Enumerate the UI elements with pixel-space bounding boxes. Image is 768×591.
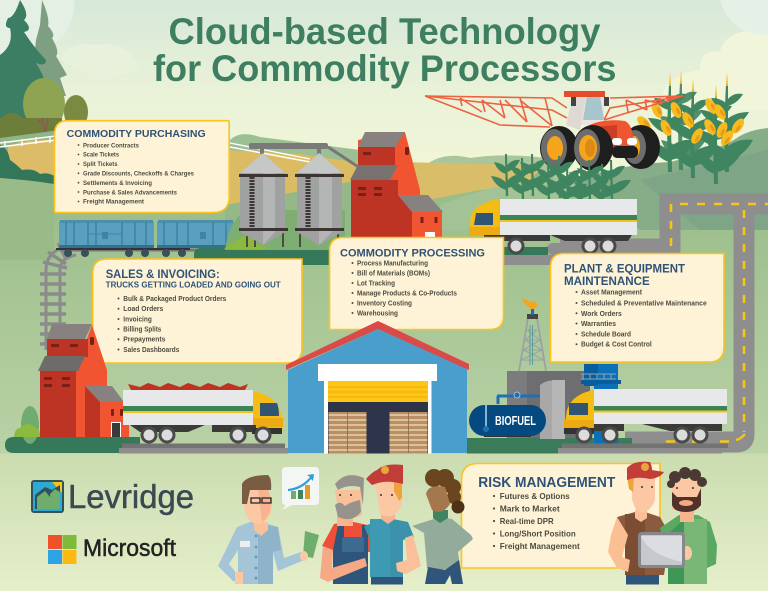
large corn stalks [635,70,753,184]
panel: sales and invoicing [93,259,302,363]
list: sales items: Sales Dashboards [123,347,179,354]
list: processing items: Warehousing [357,310,398,317]
boom arms [425,96,683,127]
list: processing items: Inventory Costing [357,300,412,307]
list: processing items: Process Manufacturing [357,260,428,267]
list: purchasing items: Settlements & Invoicing [83,180,152,187]
railroad track [40,243,240,350]
list: risk items: Futures & Options [500,491,570,501]
bushes near silos [224,210,345,250]
logo: Microsoft [48,535,176,564]
panel: commodity purchasing [54,121,229,212]
refinery buildings [507,364,621,445]
green ground right [467,438,632,454]
grain elevator top [350,132,443,238]
panel: plant and equipment maintenance [550,254,724,362]
truck: bottom-right [564,389,727,444]
white fence [0,136,310,162]
person: bearded man in green jacket [660,467,717,584]
list: processing items [352,260,457,317]
person: woman with curly hair [412,469,473,584]
clouds [0,0,768,110]
warehouse door [324,381,432,454]
list: purchasing items: Grade Discounts, Checkoffs & Charges [83,170,194,178]
Levridge wordmark: Levridge [68,478,194,515]
speech bubble with chart icon [282,467,319,510]
list: sales items [118,296,226,354]
panel: commodity processing [330,238,504,330]
person: man with beard and overalls [320,475,373,584]
list: processing items: Bill of Materials (BOMs) [357,270,430,277]
road pad under top truck [504,243,587,265]
grain elevator bottom-left [5,324,140,453]
grain silos [239,143,360,247]
train [56,220,234,257]
list: purchasing items: Split Tickets [83,161,118,168]
heading: sales and invoicing: SALES & INVOICING: [106,269,220,281]
panel: risk management [462,464,660,568]
left hill and gold field [0,130,60,260]
warehouse [286,321,469,454]
list: purchasing items [78,142,194,206]
list: maintenance items: Work Orders [581,311,622,318]
list: maintenance items: Schedule Board [581,331,631,338]
list: sales items: Bulk & Packaged Product Orders [123,296,226,303]
biofuel label: BIOFUEL [495,413,536,428]
platform right [558,444,728,454]
truck: top [469,199,637,254]
warehouse sign [318,364,437,381]
list: risk items: Real-time DPR [500,516,554,526]
list: sales items: Load Orders [123,306,163,313]
title: Cloud-based Technology [168,11,601,52]
list: maintenance items: Scheduled & Preventative Maintenance [581,300,707,308]
oil derrick [519,298,546,371]
title: for Commodity Processors [153,48,616,89]
truck: bottom-left with red load [123,383,283,444]
list: maintenance items: Asset Management [581,290,643,296]
background sky [0,0,768,180]
lower band [0,454,768,591]
heading: commodity purchasing: COMMODITY PURCHASING [67,128,206,140]
trees [0,0,88,138]
warehouse roof [286,321,469,370]
list: processing items: Lot Tracking [357,280,395,287]
person: man in red cap and brown shirt [608,462,670,584]
Levridge icon [31,480,64,513]
list: risk items [493,491,580,551]
heading: risk management: RISK MANAGEMENT [478,475,615,491]
list: maintenance items: Budget & Cost Control [581,342,652,349]
list: purchasing items: Purchase & Sales Advancements [83,189,177,196]
title [153,11,616,89]
heading: plant and equipment maintenance: MAINTENANCE [564,274,650,288]
list: purchasing items: Scale Tickets [83,152,119,159]
road dashes bottom [666,434,745,442]
list: risk items: Long/Short Position [500,528,576,538]
logo: Levridge [31,478,194,515]
far hills middle [225,134,360,240]
sprayer tractor [425,91,683,171]
body [584,120,634,150]
tyres [622,125,660,169]
tablet [638,532,685,568]
logo: Microsoft: Microsoft [83,535,176,562]
roads [560,204,768,442]
list: maintenance items [576,290,707,349]
heading: commodity processing: COMMODITY PROCESSING [340,248,485,260]
platform left [119,444,288,454]
list: sales items: Billing Splits [123,326,161,334]
far hills right [400,128,768,230]
cab [566,95,604,125]
list: risk items: Freight Management [500,541,580,551]
list: risk items: Mark to Market [500,504,560,514]
subheading: trucks: TRUCKS GETTING LOADED AND GOING OUT [106,280,281,290]
list: maintenance items: Warranties [581,321,616,328]
list: purchasing items: Producer Contracts [83,142,139,149]
green ground strip middle [194,248,334,265]
list: purchasing items: Freight Management [83,199,145,206]
ground [0,176,768,456]
small corn field [491,154,631,206]
list: sales items: Prepayments [123,337,165,344]
heading: plant and equipment maintenance: PLANT & EQUIPMENT [564,262,686,276]
list: sales items: Invoicing [123,316,152,323]
person: man in red cap and teal shirt [364,465,421,584]
person: man with glasses [218,475,319,584]
list: processing items: Manage Products & Co-Products [357,290,457,297]
biofuel tank [469,392,546,437]
